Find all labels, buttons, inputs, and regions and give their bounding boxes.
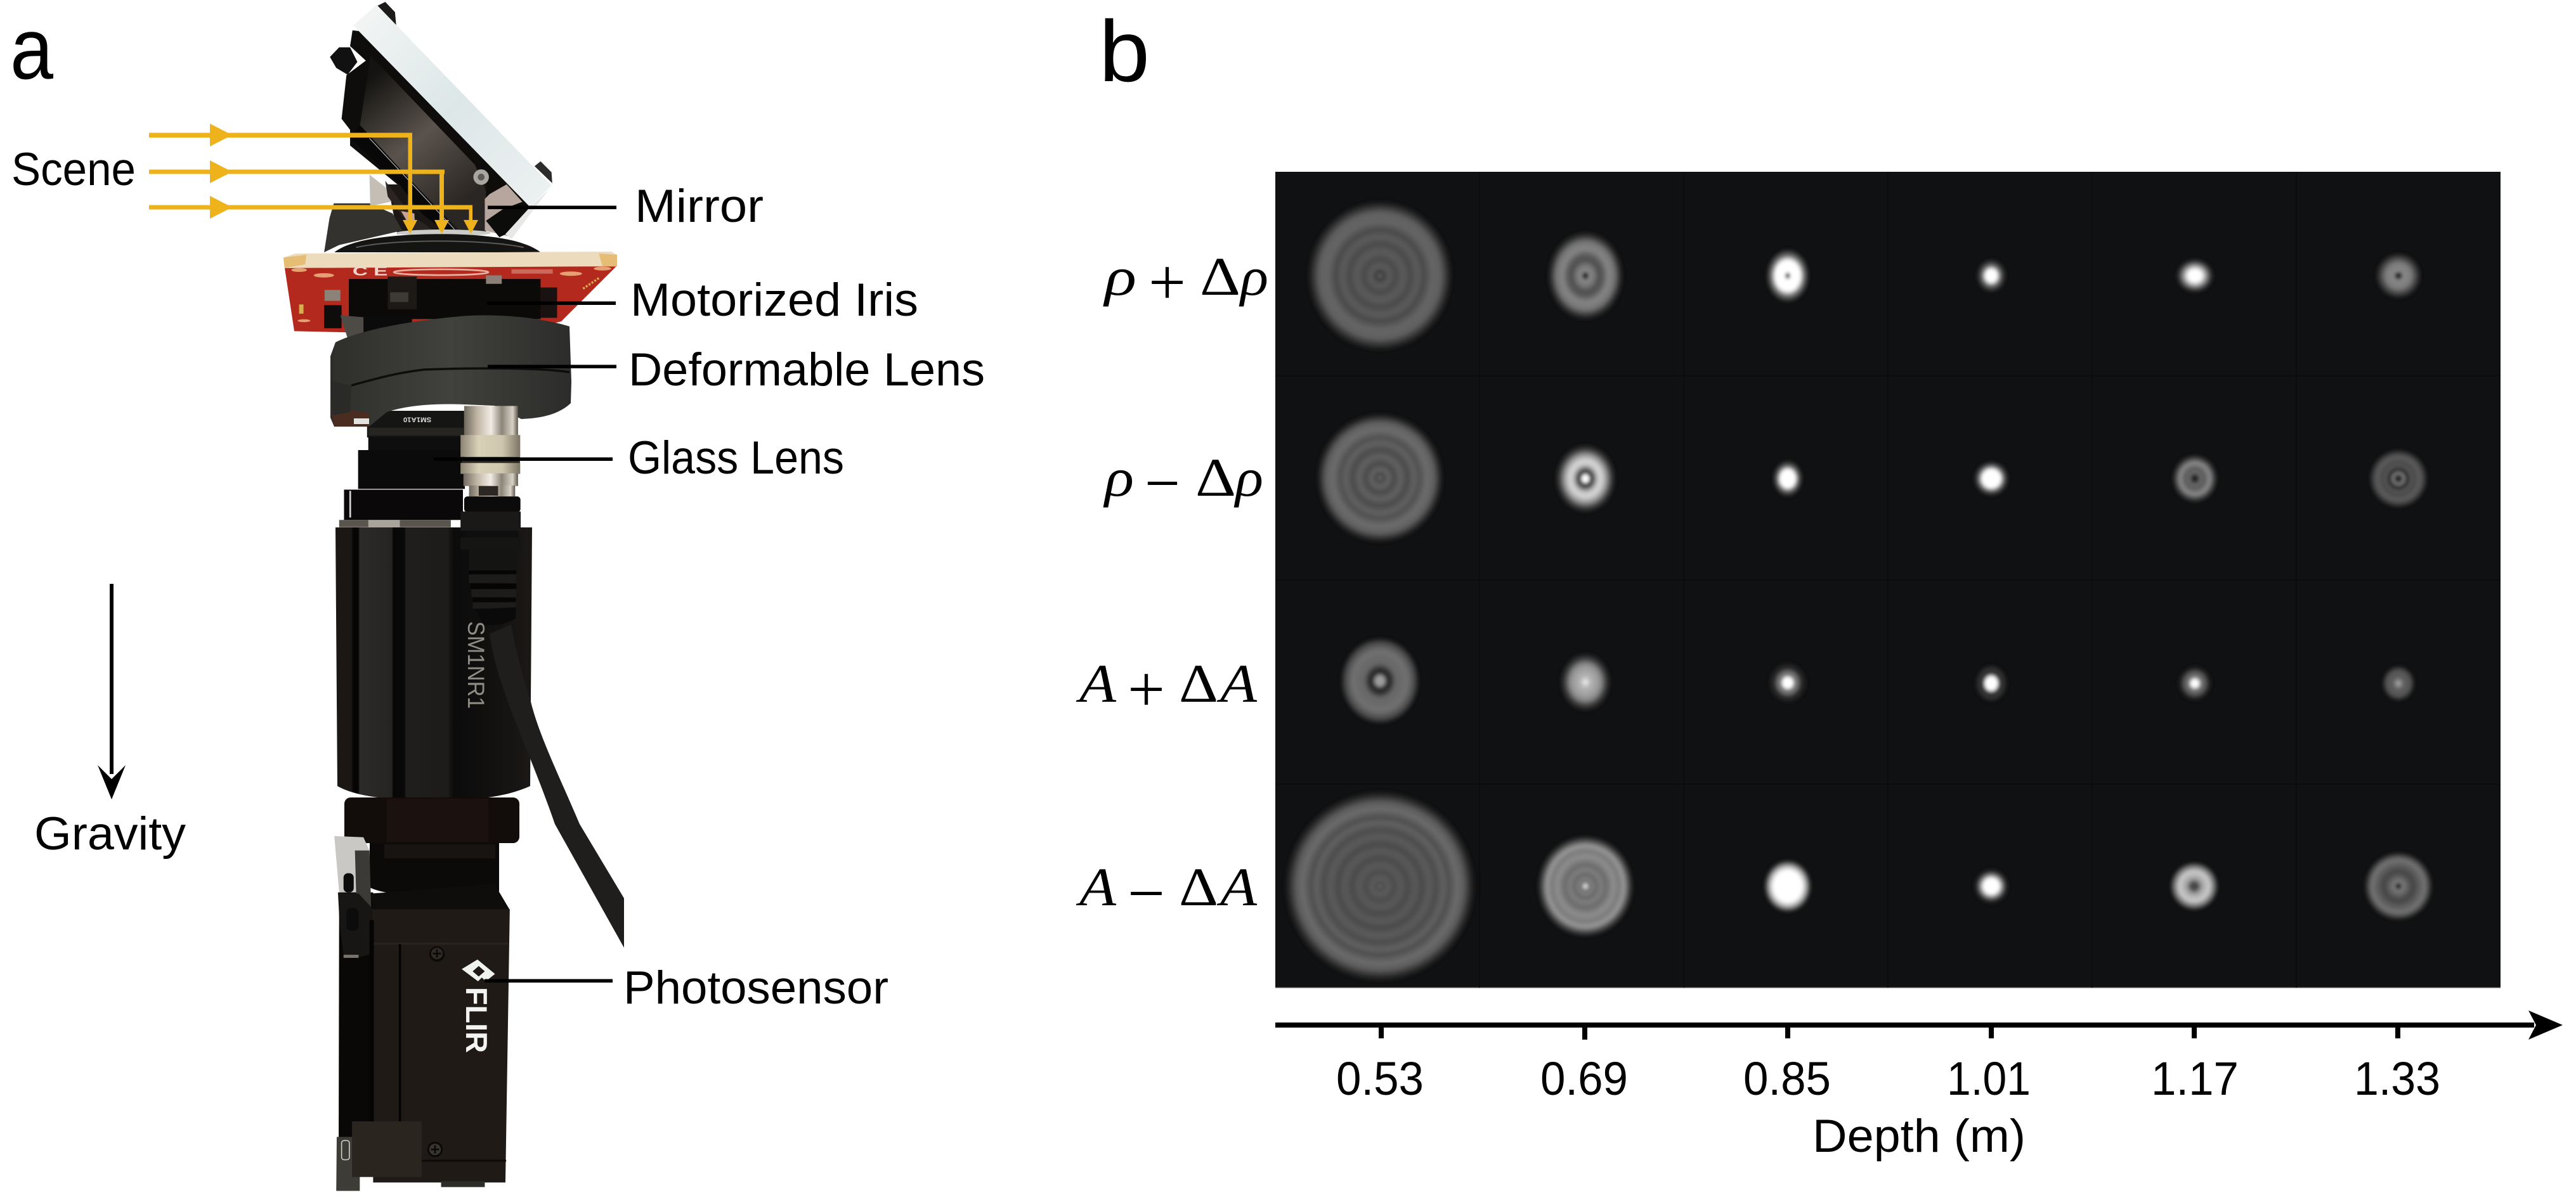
- row label: A minus delta A: −: [1128, 857, 1165, 930]
- tick label 1.17: 1.17: [2151, 1052, 2239, 1105]
- row label: rho minus delta rho: Δ: [1195, 447, 1236, 508]
- FLIR logo mark: [462, 960, 495, 983]
- row label: A minus delta A: A: [1216, 856, 1258, 917]
- glass lens stack: SM1A10: [403, 416, 431, 423]
- scene light rays: [149, 124, 478, 234]
- leader: Motorized Iris: [487, 302, 616, 305]
- row label: A plus delta A: A: [1076, 653, 1117, 714]
- row label: A plus delta A: A: [1216, 653, 1258, 714]
- row label: rho minus delta rho: ρ: [1233, 447, 1263, 508]
- tick label 1.33: 1.33: [2354, 1052, 2440, 1105]
- panel a: photo of lens assembly: [283, 2, 624, 1191]
- motorized iris board: C E: [353, 264, 387, 278]
- motorized iris board: [283, 252, 617, 339]
- row label: A plus delta A: +: [1128, 653, 1165, 726]
- cable: [490, 624, 624, 948]
- ray 1: [149, 124, 417, 234]
- row label: rho plus delta rho: ρ: [1239, 246, 1268, 307]
- row label: A minus delta A: Δ: [1179, 856, 1218, 917]
- glass lens stack: [339, 411, 465, 527]
- leader: Mirror: [488, 205, 616, 209]
- row label: rho plus delta rho: Δ: [1200, 246, 1240, 307]
- row 1 spots: [1308, 201, 2421, 351]
- label: Scene: Scene: [11, 144, 136, 195]
- row 2 spots: [1317, 413, 2428, 543]
- label: Deformable Lens: Deformable Lens: [628, 344, 985, 396]
- row label: rho minus delta rho: ρ: [1103, 447, 1134, 508]
- label: Glass Lens: Glass Lens: [628, 432, 844, 484]
- FLIR logo text: FLIR: [460, 987, 493, 1053]
- ray 3: [149, 196, 478, 234]
- row label: A minus delta A: A: [1076, 856, 1117, 917]
- axis title: Depth (m): [1812, 1111, 2026, 1162]
- row label: rho plus delta rho: ρ: [1102, 246, 1136, 307]
- depth axis arrow: [1275, 1010, 2563, 1040]
- panel b: PSF image grid: [1275, 172, 2501, 988]
- row 3 spots: [1341, 638, 2415, 724]
- tick label 1.01: 1.01: [1947, 1052, 2031, 1105]
- lower lens ring and neck: [344, 797, 519, 897]
- label: Photosensor: Photosensor: [623, 962, 888, 1014]
- ray 2: [149, 160, 449, 234]
- row label: rho plus delta rho: [1102, 246, 1268, 319]
- row 4 spots: [1285, 791, 2433, 981]
- row label: A minus delta A: [1076, 856, 1258, 930]
- lens barrel tube: [335, 527, 532, 801]
- panel letter a: a: [10, 1, 54, 98]
- row label: rho plus delta rho: +: [1148, 246, 1186, 319]
- label: Motorized Iris: Motorized Iris: [630, 274, 918, 326]
- panel letter b: b: [1099, 3, 1150, 100]
- deformable lens: [330, 315, 571, 427]
- leader: Photosensor: [485, 979, 613, 983]
- cable connector: [460, 406, 521, 625]
- tick label 0.69: 0.69: [1540, 1052, 1628, 1105]
- row label: rho minus delta rho: −: [1145, 447, 1180, 520]
- photosensor camera: [334, 836, 510, 1191]
- row label: A plus delta A: Δ: [1179, 653, 1218, 714]
- leader: Deformable Lens: [488, 365, 616, 368]
- row label: A plus delta A: [1076, 653, 1258, 726]
- leader: Glass Lens: [434, 458, 613, 461]
- tick label 0.53: 0.53: [1336, 1052, 1424, 1105]
- label: Gravity: Gravity: [34, 808, 186, 860]
- label: Mirror: Mirror: [635, 181, 764, 232]
- barrel engraving: SM1NR1: [463, 621, 489, 709]
- gravity arrow: [98, 584, 126, 799]
- tick label 0.85: 0.85: [1743, 1052, 1831, 1105]
- row label: rho minus delta rho: [1103, 447, 1263, 520]
- mirror assembly: [324, 2, 552, 252]
